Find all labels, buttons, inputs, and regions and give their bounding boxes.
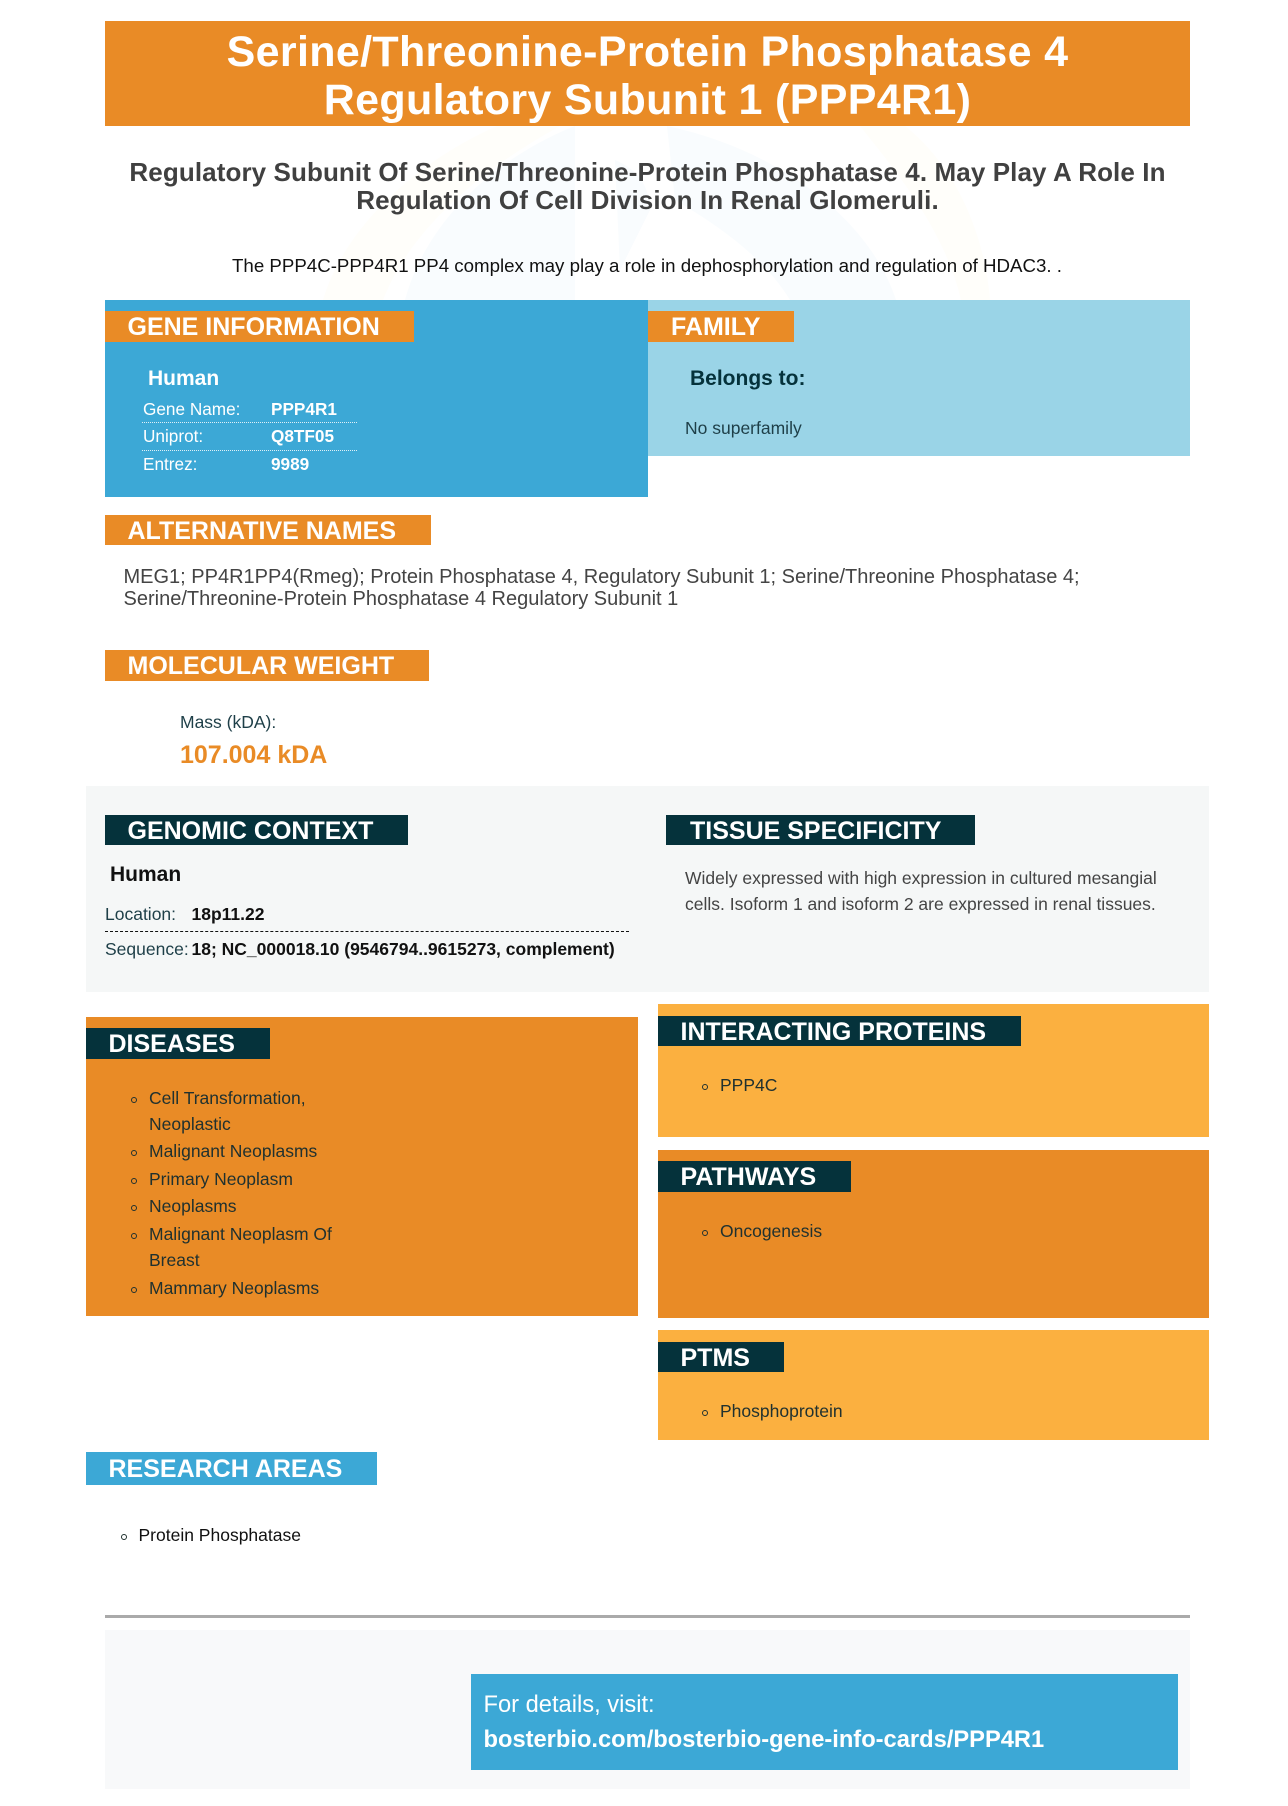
panel: genomic context and tissue specificity: 18; NC_000018.10 (9546794..9615273, complement) [192, 939, 615, 959]
disease list: Breast [149, 1250, 200, 1270]
disease list: Malignant Neoplasms [149, 1141, 317, 1161]
url: bosterbio.com/bosterbio-gene-info-cards/PPP4R1 [484, 1727, 1044, 1753]
disease list [131, 1088, 332, 1298]
panel: footer [105, 1630, 1190, 1789]
subtitle [129, 157, 1166, 215]
panel: gene information: PPP4R1 [271, 399, 337, 419]
belongs to label: Belongs to: [690, 367, 806, 390]
panel: gene information: Q8TF05 [271, 426, 334, 446]
panel: genomic context and tissue specificity [86, 786, 1209, 992]
title banner: Serine/Threonine-Protein Phosphatase 4 [227, 28, 1068, 76]
disease list: Cell Transformation, [149, 1088, 306, 1108]
disease list: Neoplasms [149, 1196, 237, 1216]
family value: No superfamily [685, 418, 802, 438]
panel: interacting proteins [658, 1004, 1209, 1137]
heading: alternative names: ALTERNATIVE NAMES [128, 517, 396, 545]
heading: tissue specificity: TISSUE SPECIFICITY [690, 817, 941, 845]
species label: Human [110, 863, 181, 886]
location row: Location: [105, 904, 176, 924]
heading: genomic context: GENOMIC CONTEXT [128, 817, 373, 845]
heading: molecular weight: MOLECULAR WEIGHT [128, 652, 394, 680]
heading: ptms: PTMS [680, 1344, 750, 1372]
heading: family: FAMILY [671, 313, 760, 341]
location row [105, 904, 264, 924]
alternative names text [124, 566, 1080, 610]
list item: Protein Phosphatase [138, 1525, 301, 1545]
visit label: For details, visit: [484, 1692, 655, 1718]
heading: family [648, 311, 794, 342]
disease list: Primary Neoplasm [149, 1169, 293, 1189]
heading: gene information: GENE INFORMATION [128, 313, 380, 341]
tissue specificity text: cells. Isoform 1 and isoform 2 are expressed in renal tissues. [685, 894, 1156, 914]
list item: PPP4C [720, 1075, 777, 1095]
panel: gene information: 9989 [271, 454, 309, 474]
uniprot row: Uniprot: [143, 426, 203, 446]
heading: ptms [658, 1342, 784, 1372]
mass value: 107.004 kDA [180, 741, 327, 769]
gene name row [143, 399, 337, 419]
alternative names text: Serine/Threonine-Protein Phosphatase 4 Regulatory Subunit 1 [124, 588, 678, 610]
disease list: Mammary Neoplasms [149, 1278, 319, 1298]
heading: pathways: PATHWAYS [680, 1163, 816, 1191]
sequence row [105, 939, 615, 959]
title banner: Regulatory Subunit 1 (PPP4R1) [324, 76, 971, 124]
callout: details link [471, 1674, 1178, 1770]
subtitle: Regulation Of Cell Division In Renal Glomeruli. [356, 185, 939, 215]
panel: family [648, 300, 1190, 456]
disease list: Malignant Neoplasm Of [149, 1224, 332, 1244]
uniprot row [143, 426, 334, 446]
panel: gene information [105, 300, 648, 497]
panel: pathways [658, 1150, 1209, 1318]
background watermark logo [0, 126, 1288, 300]
heading: diseases: DISEASES [108, 1030, 235, 1058]
heading: interacting proteins: INTERACTING PROTEINS [680, 1018, 986, 1046]
heading: research areas: RESEARCH AREAS [108, 1455, 342, 1483]
sequence row: Sequence: [105, 939, 189, 959]
heading: research areas [86, 1452, 377, 1485]
gene name row: Gene Name: [143, 399, 240, 419]
heading: pathways [658, 1161, 851, 1192]
tissue specificity text: Widely expressed with high expression in cultured mesangial [685, 868, 1157, 888]
species label: Human [148, 367, 219, 390]
list item: Oncogenesis [720, 1221, 822, 1241]
subtitle: Regulatory Subunit Of Serine/Threonine-Protein Phosphatase 4. May Play A Role In [129, 157, 1166, 187]
mass label: Mass (kDA): [180, 712, 276, 732]
entrez row: Entrez: [143, 454, 197, 474]
title banner [105, 21, 1190, 126]
disease list: Neoplastic [149, 1114, 231, 1134]
entrez row [143, 454, 309, 474]
panel: ptms [658, 1330, 1209, 1440]
panel: diseases [86, 1017, 638, 1316]
panel: genomic context and tissue specificity: 18p11.22 [192, 904, 264, 924]
tissue specificity text [685, 868, 1157, 914]
list item: Phosphoprotein [720, 1401, 843, 1421]
summary text: The PPP4C-PPP4R1 PP4 complex may play a role in dephosphorylation and regulation of HDAC3. . [232, 255, 1062, 276]
alternative names text: MEG1; PP4R1PP4(Rmeg); Protein Phosphatase 4, Regulatory Subunit 1; Serine/Threonine Phosphatase 4; [124, 566, 1080, 588]
heading: diseases [86, 1028, 270, 1059]
